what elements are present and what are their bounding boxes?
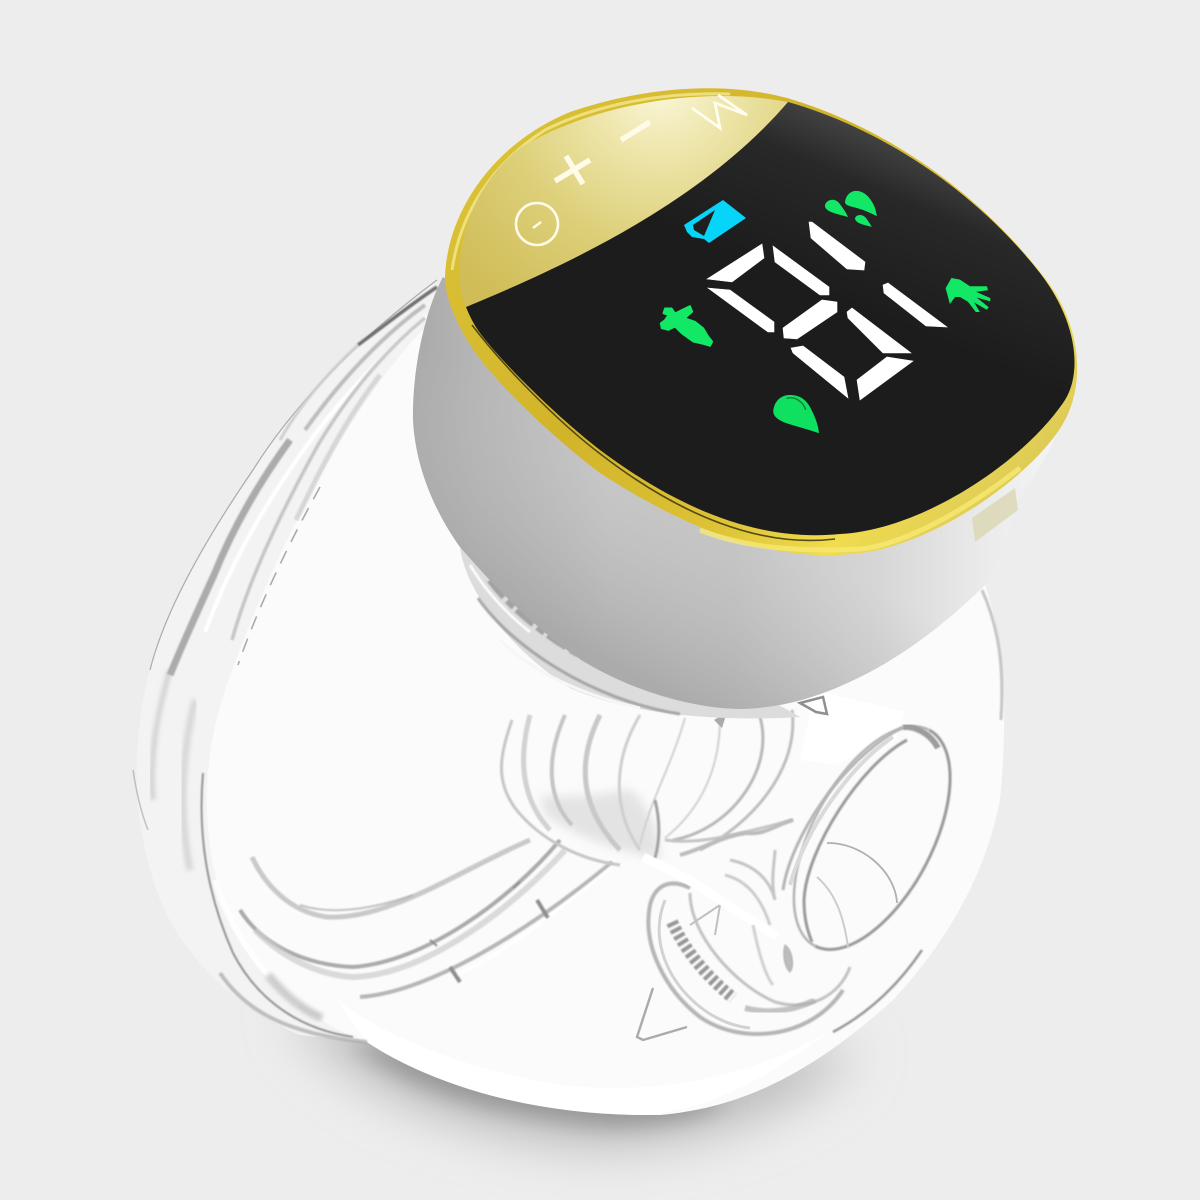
gold rim (445, 88, 1077, 555)
icon: bottle (661, 306, 712, 346)
icon: droplets (825, 191, 877, 227)
seven segment digits (707, 222, 947, 400)
flange rim lines (133, 280, 437, 1042)
button: minus (621, 122, 650, 140)
black screen (466, 102, 1075, 535)
button: plus (555, 156, 590, 184)
bottle right edge (833, 590, 1002, 1032)
outlet ring (783, 727, 950, 949)
white diagonal strut (643, 857, 777, 937)
ground shadow (290, 1010, 860, 1145)
bottle base lighter band (337, 1000, 830, 1115)
button: power (516, 203, 558, 245)
motor body (413, 277, 1057, 709)
neck tube (501, 710, 793, 865)
gold face (459, 96, 788, 307)
button: M (692, 95, 747, 128)
funnel arcs (240, 840, 614, 997)
bottle interior (207, 323, 1004, 1115)
connector band (714, 690, 905, 765)
lower valve ring (637, 883, 850, 1040)
icon: battery (684, 200, 746, 243)
lower rim shadow line (472, 325, 835, 540)
flange rim zone (137, 280, 480, 1042)
logo plate (972, 488, 1018, 542)
icon: hand (946, 278, 990, 312)
icon: drop (773, 395, 819, 433)
control panel (445, 88, 1077, 555)
central valve detail (680, 820, 793, 985)
lower rim bright band (700, 468, 1020, 550)
clear bottle and flange (133, 280, 1004, 1115)
rim highlight (452, 94, 730, 270)
collar under motor (460, 547, 800, 718)
